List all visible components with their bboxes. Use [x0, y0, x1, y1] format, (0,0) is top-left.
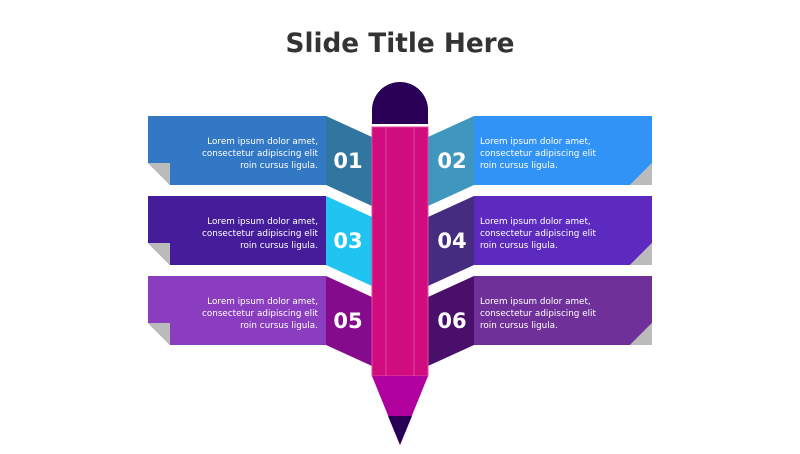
- item 02: roin cursus ligula.: [480, 161, 558, 171]
- item 03: Lorem ipsum dolor amet,: [207, 217, 318, 227]
- item 06: roin cursus ligula.: [480, 321, 558, 331]
- title: Slide Title Here: [286, 29, 514, 59]
- item 03: [148, 196, 372, 286]
- item 04: roin cursus ligula.: [480, 241, 558, 251]
- item 06: [428, 276, 652, 366]
- item 05: consectetur adipiscing elit: [202, 309, 319, 319]
- item 05: Lorem ipsum dolor amet,: [207, 297, 318, 307]
- item 01: roin cursus ligula.: [240, 161, 318, 171]
- item 03: consectetur adipiscing elit: [202, 229, 319, 239]
- item 05: 05: [333, 309, 363, 333]
- item 04: Lorem ipsum dolor amet,: [480, 217, 591, 227]
- item 02: Lorem ipsum dolor amet,: [480, 137, 591, 147]
- pencil: [372, 82, 428, 445]
- item 05: roin cursus ligula.: [240, 321, 318, 331]
- item 02: [428, 116, 652, 206]
- item 01: consectetur adipiscing elit: [202, 149, 319, 159]
- item 03: roin cursus ligula.: [240, 241, 318, 251]
- item 02: 02: [437, 149, 467, 173]
- item 01: 01: [333, 149, 363, 173]
- item 01: [148, 116, 372, 206]
- item 01: Lorem ipsum dolor amet,: [207, 137, 318, 147]
- item 06: consectetur adipiscing elit: [480, 309, 596, 319]
- item 03: 03: [333, 229, 363, 253]
- item 05: [148, 276, 372, 366]
- item 04: [428, 196, 652, 286]
- item 06: 06: [437, 309, 467, 333]
- item 06: Lorem ipsum dolor amet,: [480, 297, 591, 307]
- item 04: consectetur adipiscing elit: [480, 229, 596, 239]
- item 04: 04: [437, 229, 467, 253]
- item 02: consectetur adipiscing elit: [480, 149, 596, 159]
